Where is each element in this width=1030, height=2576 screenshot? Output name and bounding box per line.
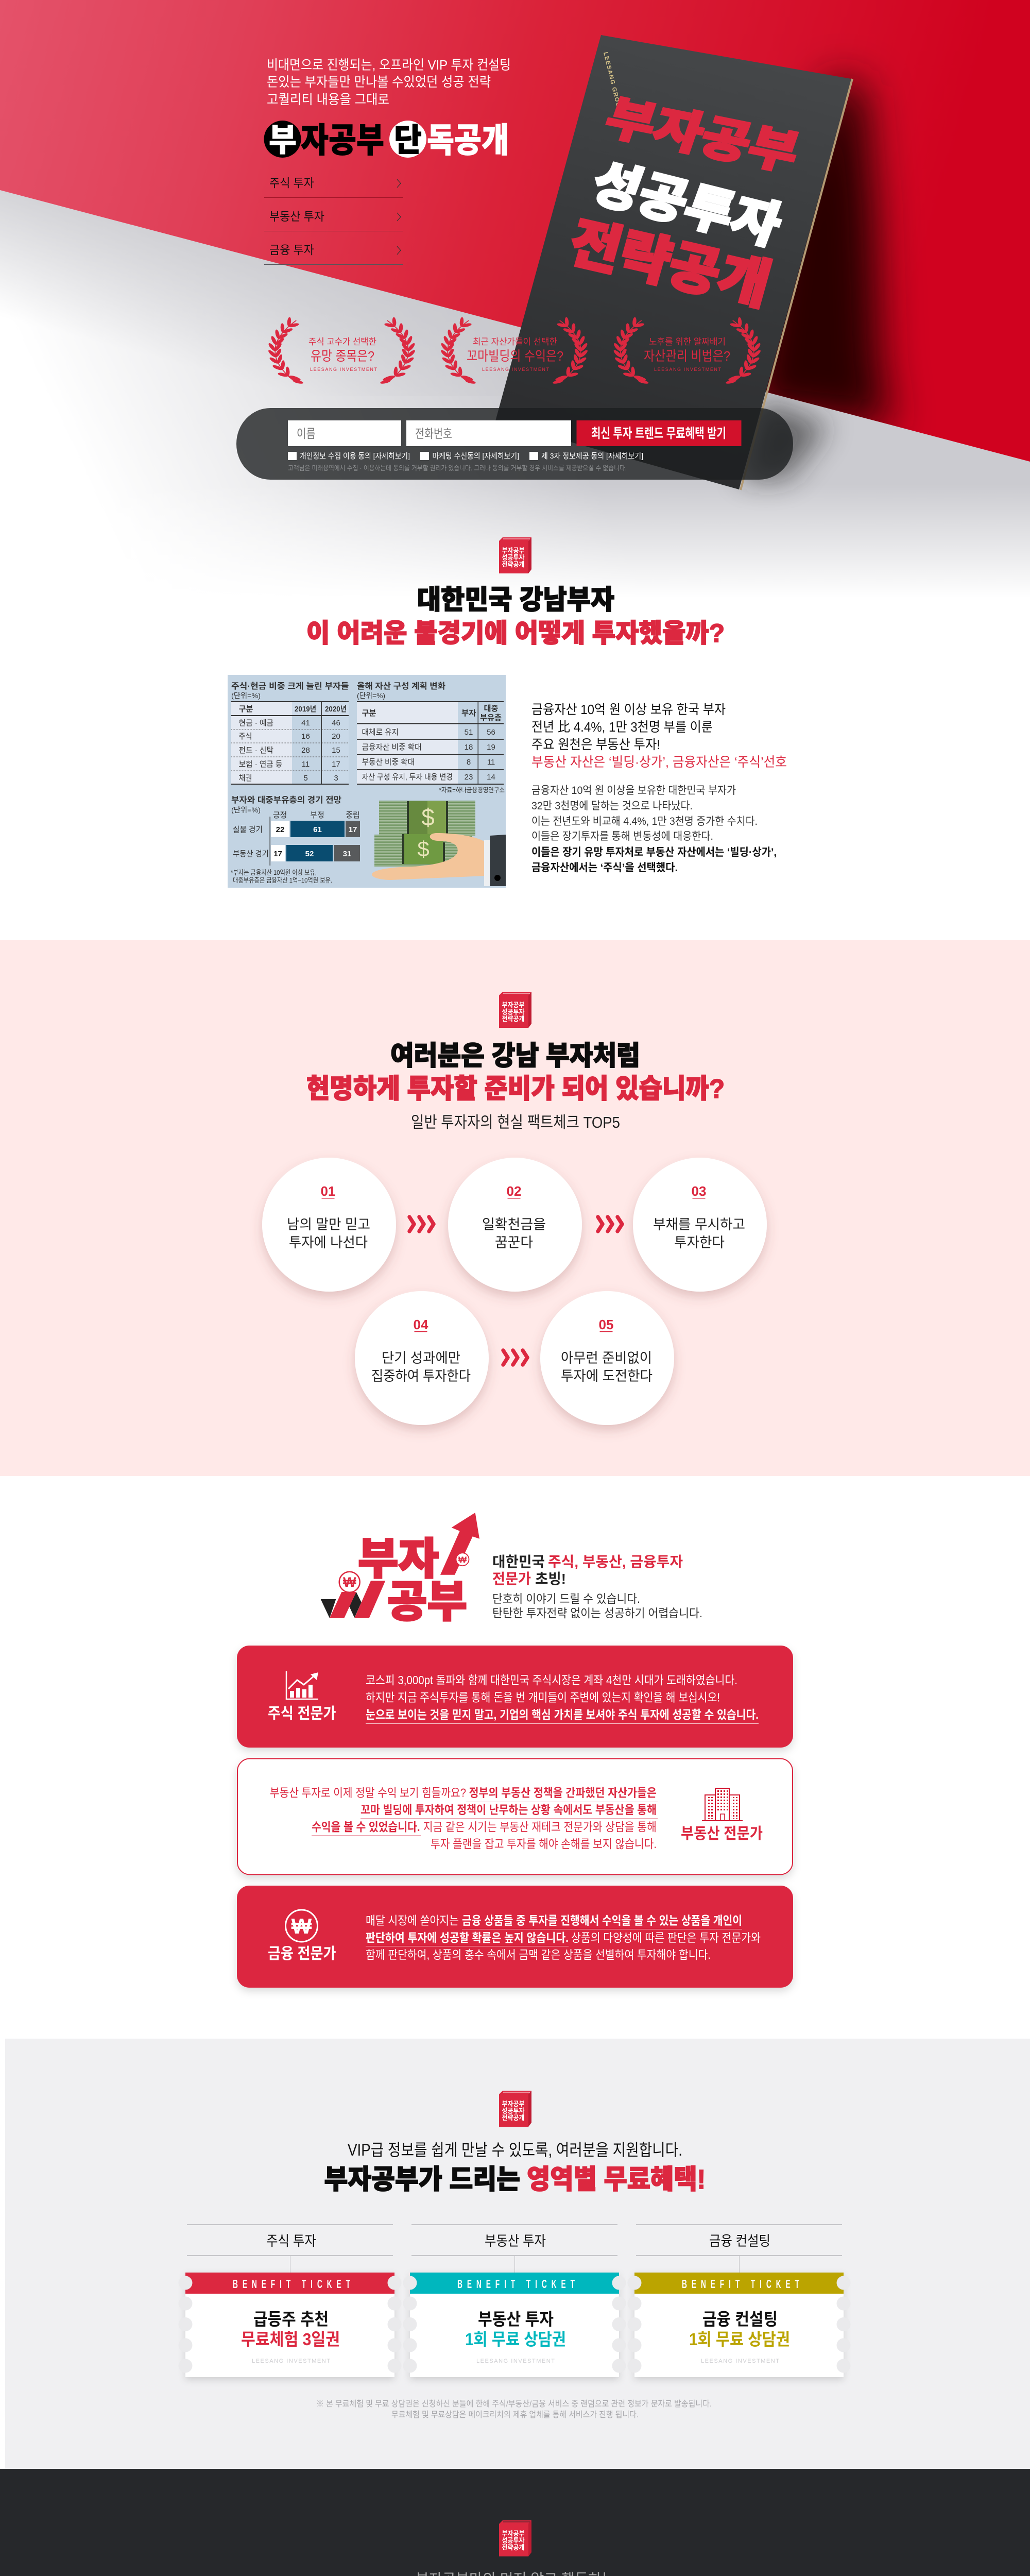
section: benefits (5, 2039, 1030, 2469)
bar chart: economic outlook: 부동산 경기 (233, 850, 269, 858)
icon: building (702, 1788, 743, 1821)
book cover: LEESANG GROUP (602, 52, 623, 112)
circle 04: 단기 성과에만 (382, 1350, 460, 1366)
book cover: 부자공부 (599, 92, 806, 180)
title line 1: 대한민국 강남부자 (417, 585, 614, 615)
table: right asset plan: 14 (487, 773, 495, 782)
panel: real estate expert (237, 1759, 793, 1874)
bar chart: economic outlook: *부자는 금융자산 10억원 이상 보유, (231, 869, 317, 876)
heading: 영역별 무료혜택! (527, 2165, 706, 2195)
heading: 부자공부가 드리는 (324, 2165, 520, 2195)
circle 04: 집중하여 투자한다 (371, 1368, 471, 1384)
circle 03 (633, 1158, 767, 1292)
table: right asset plan: 부유층 (480, 714, 502, 722)
text block: rich body copy: 금융자산에서는 ‘주식’을 선택했다. (531, 862, 678, 874)
ticket: finance: 1회 무료 상담권 (689, 2330, 790, 2349)
table: left cash and stock share: 2020년 (325, 705, 347, 714)
table: left cash and stock share: 46 (332, 719, 340, 727)
bar chart: economic outlook: 부자와 대중부유층의 경기 전망 (231, 795, 341, 805)
section: process (0, 2469, 1030, 2576)
table: left cash and stock share: 구분 (239, 705, 253, 714)
subheading: 일반 투자자의 현실 팩트체크 TOP5 (411, 1113, 620, 1131)
icon: book (499, 992, 531, 1028)
text block: rich body copy: 이들은 장기투자를 통해 변동성에 대응한다. (531, 831, 713, 842)
logo: 부자공부 with rising arrow: ₩ (458, 1555, 467, 1565)
text block: rich headline summary: 전년 比 4.4%, 1만 3천명 부를 이룬 (531, 719, 713, 735)
hero menu list: 금융 투자 (269, 243, 314, 257)
body text: 눈으로 보이는 것을 믿지 말고, 기업의 핵심 가치를 보셔야 주식 투자에 성공할 수 있습니다. (366, 1708, 759, 1721)
body text (270, 1786, 658, 1851)
bar chart: economic outlook: 대중부유층은 금융자산 1억~10억원 보유. (233, 876, 332, 884)
column heading: real estate: 부동산 투자 (485, 2233, 546, 2249)
icon: book: 부자공부 (502, 1001, 525, 1009)
section: reality check top 5 (0, 940, 1030, 1476)
icon: book: 부자공부 (502, 2530, 525, 2537)
ticket: stock: LEESANG INVESTMENT (252, 2358, 330, 2364)
book cover: 전략공개 (563, 212, 777, 316)
signup form pill: 마케팅 수신동의 [자세히보기] (433, 452, 519, 461)
circle 01: 투자에 나선다 (289, 1235, 368, 1250)
hero logo headline: 독공개 (427, 121, 509, 159)
text block: rich body copy: 금융자산 10억 원 이상을 보유한 대한민국 부자가 (531, 785, 736, 796)
ticket: stock: 급등주 추천 (253, 2310, 329, 2329)
footnote (316, 2399, 712, 2419)
label: 주식 전문가 (268, 1705, 336, 1722)
hero intro text (267, 57, 511, 107)
table: right asset plan: 대중 (484, 704, 499, 713)
table: left cash and stock share: 채권 (239, 774, 252, 783)
illustration: hand holding money: $ (421, 804, 435, 831)
bar chart: economic outlook: 52 (305, 850, 314, 858)
table: right asset plan: 부동산 비중 확대 (362, 758, 415, 767)
icon: book: 부자공부 (502, 547, 525, 554)
table: right asset plan: 구분 (362, 709, 376, 718)
hero logo headline (264, 121, 509, 159)
table: right asset plan: 56 (487, 728, 495, 737)
table: left cash and stock share: 보험 · 연금 등 (239, 760, 283, 769)
body text: 투자 플랜을 잡고 투자를 해야 손해를 보지 않습니다. (431, 1837, 657, 1851)
title line 2: 이 어려운 불경기에 어떻게 투자했을까? (306, 619, 725, 648)
laurel badge 2: 최근 자산가들이 선택한 (473, 337, 557, 347)
hero intro text: 고퀄리티 내용을 그대로 (267, 92, 389, 107)
bar chart: economic outlook: 22 (276, 825, 284, 834)
body text: 수익을 볼 수 있었습니다. (312, 1820, 420, 1834)
text block: rich body copy: 이는 전년도와 비교해 4.4%, 1만 3천명 증가한 수치다. (531, 816, 758, 827)
text block: expert intro: 대한민국 (492, 1554, 545, 1570)
signup form pill: 전화번호 (415, 427, 452, 441)
text block: rich body copy (531, 785, 777, 874)
panel: finance expert (237, 1886, 793, 1988)
arrow (503, 1350, 527, 1365)
circle 05: 05 (599, 1317, 613, 1332)
body text: 금융 상품들 중 투자를 진행해서 수익을 볼 수 있는 상품을 개인이 (462, 1914, 742, 1927)
laurel badge 2 (440, 317, 589, 384)
heading (306, 1041, 725, 1104)
signup form pill (236, 408, 793, 480)
ticket: stock (178, 2273, 402, 2377)
hero menu list: 주식 투자 (269, 176, 314, 190)
heading: 현명하게 투자할 준비가 되어 있습니까? (306, 1074, 725, 1104)
footnote: ※ 본 무료체험 및 무료 상담권은 신청하신 분들에 한해 주식/부동산/금융 서비스 중 랜덤으로 관련 정보가 문자로 발송됩니다. (316, 2399, 712, 2409)
text block: expert intro (492, 1554, 702, 1620)
signup form pill: 고객님은 미래융역에서 수집 · 이용하는데 동의를 거부할 권리가 있습니다. 그러나 동의를 거부할 경우 서비스를 제공받으실 수 없습니다. (288, 464, 627, 472)
table: right asset plan: 23 (465, 773, 473, 782)
ticket: real estate: 1회 무료 상담권 (465, 2330, 566, 2349)
ticket: real estate: 부동산 투자 (478, 2310, 554, 2329)
icon: book: 전략공개 (502, 2544, 524, 2551)
body text: 매달 시장에 쏟아지는 (366, 1914, 459, 1927)
circle 01 (262, 1158, 396, 1292)
hero logo headline: 자공부 (301, 121, 384, 159)
icon: book: 부자공부 (502, 2100, 525, 2108)
table: left cash and stock share: 16 (301, 732, 310, 741)
body text: 부동산 투자로 이제 정말 수익 보기 힘들까요? (270, 1786, 466, 1799)
section: gangnam rich heading (306, 537, 725, 648)
hero section top (0, 0, 1030, 608)
icon: book: 성공투자 (502, 2107, 525, 2114)
bar chart: economic outlook: 17 (273, 850, 282, 858)
laurel badge 2: 꼬마빌딩의 수익은? (467, 348, 563, 364)
text block: rich body copy: 이들은 장기 유망 투자처로 부동산 자산에서는 ‘빌딩·상가’, (531, 846, 777, 858)
logo: 부자공부 with rising arrow (321, 1513, 479, 1626)
text block: expert intro: 전문가 (492, 1571, 531, 1587)
text block: rich headline summary: 금융자산 10억 원 이상 보유 한국 부자 (531, 702, 726, 717)
ticket: stock: 무료체험 3일권 (241, 2330, 340, 2349)
laurel badge 3: LEESANG INVESTMENT (654, 367, 721, 372)
signup form pill: 개인정보 수집 이용 동의 [자세히보기] (300, 452, 410, 461)
circle 03: 투자한다 (674, 1235, 725, 1250)
circle 03: 03 (692, 1183, 706, 1199)
footnote: 무료체험 및 무료상담은 메이크리치의 제휴 업체를 통해 서비스가 진행 됩니다. (391, 2410, 639, 2419)
table: left cash and stock share: 41 (301, 719, 310, 727)
heading: 여러분은 강남 부자처럼 (390, 1041, 640, 1071)
circle 05: 아무런 준비없이 (561, 1350, 652, 1366)
hero logo headline: 단 (394, 123, 422, 158)
table: right asset plan: 11 (487, 758, 495, 767)
circle 01: 남의 말만 믿고 (287, 1217, 370, 1232)
hero logo headline: 부 (269, 123, 297, 158)
table: left cash and stock share: 현금 · 예금 (239, 719, 273, 727)
ticket: finance: BENEFIT TICKET (682, 2278, 799, 2291)
hero background red wall (0, 0, 1030, 462)
table: right asset plan: 올해 자산 구성 계획 변화 (357, 682, 445, 691)
body text: 함께 판단하여, 상품의 홍수 속에서 금맥 같은 상품을 선별하여 투자해야 합니다. (366, 1948, 711, 1961)
logo: 부자공부 with rising arrow: 공부 (387, 1578, 467, 1626)
text block: rich headline summary: 주요 원천은 부동산 투자! (531, 737, 660, 752)
table: right asset plan: 51 (465, 728, 473, 737)
table: left cash and stock share: 17 (332, 760, 340, 769)
icon: book: 전략공개 (502, 1015, 524, 1023)
bar chart: economic outlook: 31 (343, 850, 351, 858)
text block: expert intro: 초빙! (535, 1571, 566, 1587)
table: left cash and stock share: 15 (332, 746, 340, 755)
bar chart: economic outlook: 실물 경기 (233, 825, 263, 834)
icon: won circle (285, 1910, 317, 1942)
subheading: VIP급 정보를 쉽게 만날 수 있도록, 여러분을 지원합니다. (348, 2141, 682, 2159)
table: left cash and stock share: 28 (301, 746, 310, 755)
table: right asset plan: *자료=하나금융경영연구소 (439, 786, 505, 794)
body text: 하지만 지금 주식투자를 통해 돈을 번 개미들이 주변에 있는지 확인을 해 보십시오! (366, 1691, 720, 1704)
bar chart: economic outlook (231, 795, 360, 884)
body text (366, 1914, 761, 1961)
circle 02 (448, 1158, 582, 1292)
logo: 부자공부 with rising arrow: ₩ (343, 1574, 356, 1590)
table: right asset plan: 자산 구성 유지, 투자 내용 변경 (362, 773, 453, 782)
circle 04 (355, 1291, 489, 1425)
laurel badge 1: 유망 종목은? (311, 348, 374, 364)
circle 02: 02 (507, 1183, 521, 1199)
arrow (598, 1217, 622, 1231)
ticket: finance: LEESANG INVESTMENT (701, 2358, 779, 2364)
laurel badge 1: 주식 고수가 선택한 (308, 337, 376, 347)
table: left cash and stock share: 5 (303, 774, 308, 783)
icon: book (499, 2520, 531, 2556)
ticket: real estate: LEESANG INVESTMENT (476, 2358, 555, 2364)
laurel badge 3: 노후를 위한 알짜배기 (649, 337, 726, 347)
body text: 코스피 3,000pt 돌파와 함께 대한민국 주식시장은 계좌 4천만 시대가 도래하였습니다. (366, 1673, 737, 1687)
heading (324, 2165, 706, 2195)
circle 02: 꿈꾼다 (495, 1235, 533, 1250)
illustration: hand holding money (372, 801, 506, 886)
icon: book: 전략공개 (502, 2114, 524, 2122)
hero background floor (0, 0, 1030, 608)
hero intro text: 돈있는 부자들만 만나볼 수있었던 성공 전략 (267, 74, 491, 90)
table: left cash and stock share: 11 (302, 760, 310, 769)
body text: 꼬마 빌딩에 투자하여 정책이 난무하는 상황 속에서도 부동산을 통해 (360, 1803, 657, 1817)
body text: 지금 같은 시기는 부동산 재테크 전문가와 상담을 통해 (423, 1820, 657, 1834)
body text (366, 1673, 759, 1724)
hero menu list (264, 176, 403, 265)
icon: book (499, 537, 531, 573)
circle 05: 투자에 도전한다 (561, 1368, 653, 1384)
arrow (409, 1217, 434, 1231)
ticket: stock: BENEFIT TICKET (233, 2278, 350, 2291)
table: right asset plan: (단위=%) (357, 691, 385, 700)
label: 부동산 전문가 (681, 1825, 763, 1842)
icon: book: 성공투자 (502, 1008, 525, 1016)
icon: book: 전략공개 (502, 561, 524, 568)
panel: news graphic (228, 675, 506, 888)
table: right asset plan: 금융자산 비중 확대 (362, 743, 421, 752)
icon: book (499, 2091, 531, 2127)
body text: 정부의 부동산 정책을 간파했던 자산가들은 (469, 1786, 657, 1799)
text block: expert intro: 단호히 이야기 드릴 수 있습니다. (492, 1592, 640, 1605)
table: right asset plan: 대체로 유지 (362, 728, 399, 737)
icon: book: 성공투자 (502, 2537, 525, 2544)
ticket: real estate: BENEFIT TICKET (457, 2278, 575, 2291)
circle 02: 일확천금을 (482, 1217, 546, 1232)
circle 04: 04 (414, 1317, 428, 1332)
panel: stock expert (237, 1646, 793, 1748)
laurel badge 3 (612, 317, 762, 384)
bar chart: economic outlook: 부정 (310, 811, 324, 820)
table: right asset plan (357, 682, 505, 794)
column heading: stock: 주식 투자 (266, 2233, 316, 2249)
ticket: finance (627, 2273, 851, 2377)
table: left cash and stock share: 2019년 (295, 705, 316, 714)
bar chart: economic outlook: 61 (313, 825, 322, 834)
signup form pill: 제 3자 정보제공 동의 [자세히보기] (541, 452, 643, 461)
table: right asset plan: 8 (467, 758, 471, 767)
icon: won circle: ₩ (291, 1914, 312, 1938)
icon: book: 성공투자 (502, 553, 525, 562)
bar chart: economic outlook: (단위=%) (231, 806, 261, 814)
text block: expert intro: 주식, 부동산, 금융투자 (548, 1554, 683, 1570)
table: right asset plan: 부자 (461, 709, 476, 718)
illustration: hand holding money: $ (417, 837, 430, 861)
table: left cash and stock share: 3 (334, 774, 338, 783)
signup form pill: 최신 투자 트렌드 무료혜택 받기 (591, 426, 726, 441)
hero intro text: 비대면으로 진행되는, 오프라인 VIP 투자 컨설팅 (267, 57, 511, 73)
laurel badge 1: LEESANG INVESTMENT (310, 367, 377, 372)
circle 03: 부채를 무시하고 (653, 1217, 745, 1232)
book cover (495, 35, 852, 490)
book cover: 성공투자 (584, 155, 788, 255)
logo: 부자공부 with rising arrow: 부자 (358, 1535, 439, 1583)
text block: rich headline summary (531, 702, 787, 770)
hero menu list: 부동산 투자 (269, 210, 324, 223)
book shadow on wall (747, 77, 891, 428)
table: right asset plan: 18 (465, 743, 473, 752)
body text: 상품의 다양성에 따른 판단은 투자 전문가와 (571, 1931, 761, 1944)
table: left cash and stock share (231, 682, 349, 785)
ticket: real estate (403, 2273, 626, 2377)
table: left cash and stock share: 주식 (239, 732, 252, 741)
text block: expert intro: 탄탄한 투자전략 없이는 성공하기 어렵습니다. (492, 1606, 702, 1620)
laurel badge 3: 자산관리 비법은? (644, 348, 730, 364)
laurel badge 2: LEESANG INVESTMENT (482, 367, 549, 372)
circle 05 (540, 1291, 674, 1425)
icon: stock chart (286, 1671, 318, 1699)
bar chart: economic outlook: 중립 (346, 811, 360, 820)
book shadow on floor (742, 399, 829, 479)
laurel badge 1 (267, 317, 416, 384)
column heading: finance: 금융 컨설팅 (709, 2233, 770, 2249)
table: left cash and stock share: 펀드 · 신탁 (239, 746, 273, 755)
table: left cash and stock share: 주식·현금 비중 크게 늘린 부자들 (231, 682, 349, 691)
table: left cash and stock share: 20 (332, 732, 340, 741)
circle 01: 01 (321, 1183, 335, 1199)
bar chart: economic outlook: 17 (349, 825, 357, 834)
bar chart: economic outlook: 긍정 (273, 811, 287, 820)
signup form pill: 이름 (297, 427, 316, 441)
table: left cash and stock share: (단위=%) (231, 691, 261, 700)
text block: rich headline summary: 부동산 자산은 ‘빌딩·상가’, 금융자산은 ‘주식’선호 (531, 754, 787, 770)
body text: 판단하여 투자에 성공할 확률은 높지 않습니다. (366, 1931, 569, 1944)
label: 금융 전문가 (268, 1945, 336, 1962)
ticket: finance: 금융 컨설팅 (702, 2310, 778, 2329)
text block: rich body copy: 32만 3천명에 달하는 것으로 나타났다. (531, 800, 693, 812)
table: right asset plan: 19 (487, 743, 495, 752)
